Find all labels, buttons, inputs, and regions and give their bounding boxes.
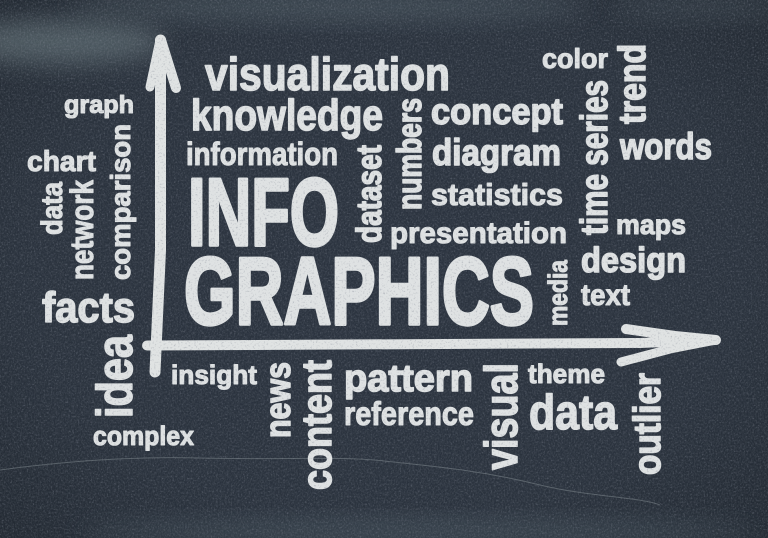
vertical word: time series: time series (574, 80, 616, 235)
word: facts: facts (42, 284, 135, 332)
word: presentation: presentation (390, 217, 567, 250)
vertical word: dataset: dataset (350, 145, 389, 243)
word: visualization: visualization (205, 48, 450, 100)
vertical word: trend: trend (612, 44, 654, 124)
vertical axis arrow (150, 40, 176, 372)
vertical word: idea: idea (87, 334, 143, 418)
word: knowledge: knowledge (191, 91, 383, 140)
vertical word: data: data (36, 182, 69, 235)
title: INFO: INFO (188, 159, 339, 266)
word: color: color (542, 43, 608, 74)
word: information: information (186, 136, 338, 172)
vertical word: news: news (257, 362, 298, 438)
word: reference: reference (344, 395, 474, 432)
vertical word: outlier: outlier (627, 373, 669, 475)
word: graph: graph (64, 91, 134, 119)
word: statistics: statistics (431, 177, 563, 212)
word: data large: data (529, 386, 618, 440)
word: maps: maps (616, 209, 686, 240)
word: words: words (619, 126, 712, 167)
word: text: text (581, 279, 630, 312)
vertical word: visual: visual (475, 363, 527, 470)
title: GRAPHICS: GRAPHICS (184, 238, 534, 345)
vertical word: comparison: comparison (105, 124, 136, 280)
vertical word: content: content (293, 360, 340, 490)
vertical word: numbers: numbers (391, 98, 429, 210)
word: pattern: pattern (344, 358, 473, 400)
vertical word: media: media (543, 259, 573, 326)
word: insight: insight (171, 360, 257, 390)
vertical word: network: network (64, 180, 100, 280)
horizontal axis arrow (147, 329, 716, 362)
word: concept: concept (431, 91, 563, 132)
word: complex: complex (93, 421, 194, 451)
word: design: design (581, 241, 686, 280)
word: theme: theme (528, 359, 605, 389)
word: chart: chart (27, 146, 96, 178)
word: diagram: diagram (432, 132, 561, 173)
